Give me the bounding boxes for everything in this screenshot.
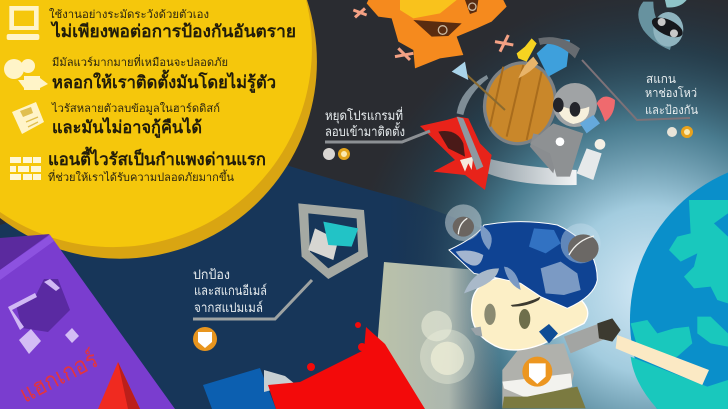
text block: warning 1 (49, 8, 296, 41)
illustration: blue mask creature (638, 0, 687, 50)
text block: warning 2 (52, 54, 276, 94)
icon: brick wall (10, 157, 41, 180)
illustration: knight with shield (452, 37, 615, 185)
illustration: hero character (420, 204, 709, 408)
face (471, 277, 588, 350)
text block: warning 1: ไม่เพียงพอต่อการป้องกันอันตราย (50, 21, 296, 41)
icon: computer (7, 6, 39, 40)
callout: stop program installs (323, 107, 430, 160)
icon: small bones (353, 8, 513, 60)
text block: warning 2: หลอกให้เราติดตั้งมันโดยไม่รู้ตัว (52, 69, 276, 94)
icon: floppy disk (12, 102, 44, 134)
illustration: purple hacker book: แฮกเกอร์ (15, 345, 103, 408)
panel: yellow circle (0, 0, 317, 259)
callout: scan for holes (582, 60, 698, 138)
callout: stop program installs: ลอบเข้ามาติดตั้ง (325, 122, 405, 139)
illustration: teal globe (630, 172, 728, 409)
illustration: purple hacker book (0, 234, 175, 409)
illustration: red flag monster (420, 117, 492, 190)
swoosh (457, 75, 488, 115)
icon: email shield (298, 203, 368, 279)
illustration: pale screen (372, 262, 500, 409)
callout: scan for holes: และป้องกัน (645, 103, 698, 117)
callout: protect email: ปกป้อง (193, 267, 230, 282)
sword (616, 335, 709, 385)
text block: warning 3 (51, 102, 220, 139)
illustration: red hammer (203, 322, 425, 409)
callout: scan for holes: สแกน (646, 72, 676, 86)
text block: warning 3: ไวรัสหลายตัวลบข้อมูลในฮาร์ดดิสก์ (51, 102, 220, 115)
callout: protect email (193, 267, 312, 351)
body (502, 343, 584, 408)
hair buns (445, 204, 601, 263)
callout: stop program installs: หยุดโปรแกรมที่ (325, 107, 403, 124)
text block: warning 3: และมันไม่อาจกู้คืนได้ (52, 117, 202, 139)
callout: protect email: และสแกนอีเมล์ (194, 283, 267, 298)
icon: malware faces (4, 59, 48, 90)
illustration: orange monster (367, 0, 507, 68)
energy ball (420, 311, 475, 384)
callout: protect email: จากสแปมเมล์ (194, 300, 263, 315)
text block: warning 2: มีมัลแวร์มากมายที่เหมือนจะปลอดภัย (52, 54, 228, 69)
text block: warning 1: ใช้งานอย่างระมัดระวังด้วยตัวเอง (49, 8, 209, 21)
callout: scan for holes: หาช่องโหว่ (645, 86, 697, 100)
arm (564, 322, 611, 353)
hair (449, 222, 597, 308)
text block: firewall: แอนตี้ไวรัสเป็นกำแพงด่านแรก (48, 146, 266, 169)
text block: firewall: ที่ช่วยให้เราได้รับความปลอดภัยมากขึ้น (48, 169, 234, 184)
text block: firewall (48, 146, 266, 184)
